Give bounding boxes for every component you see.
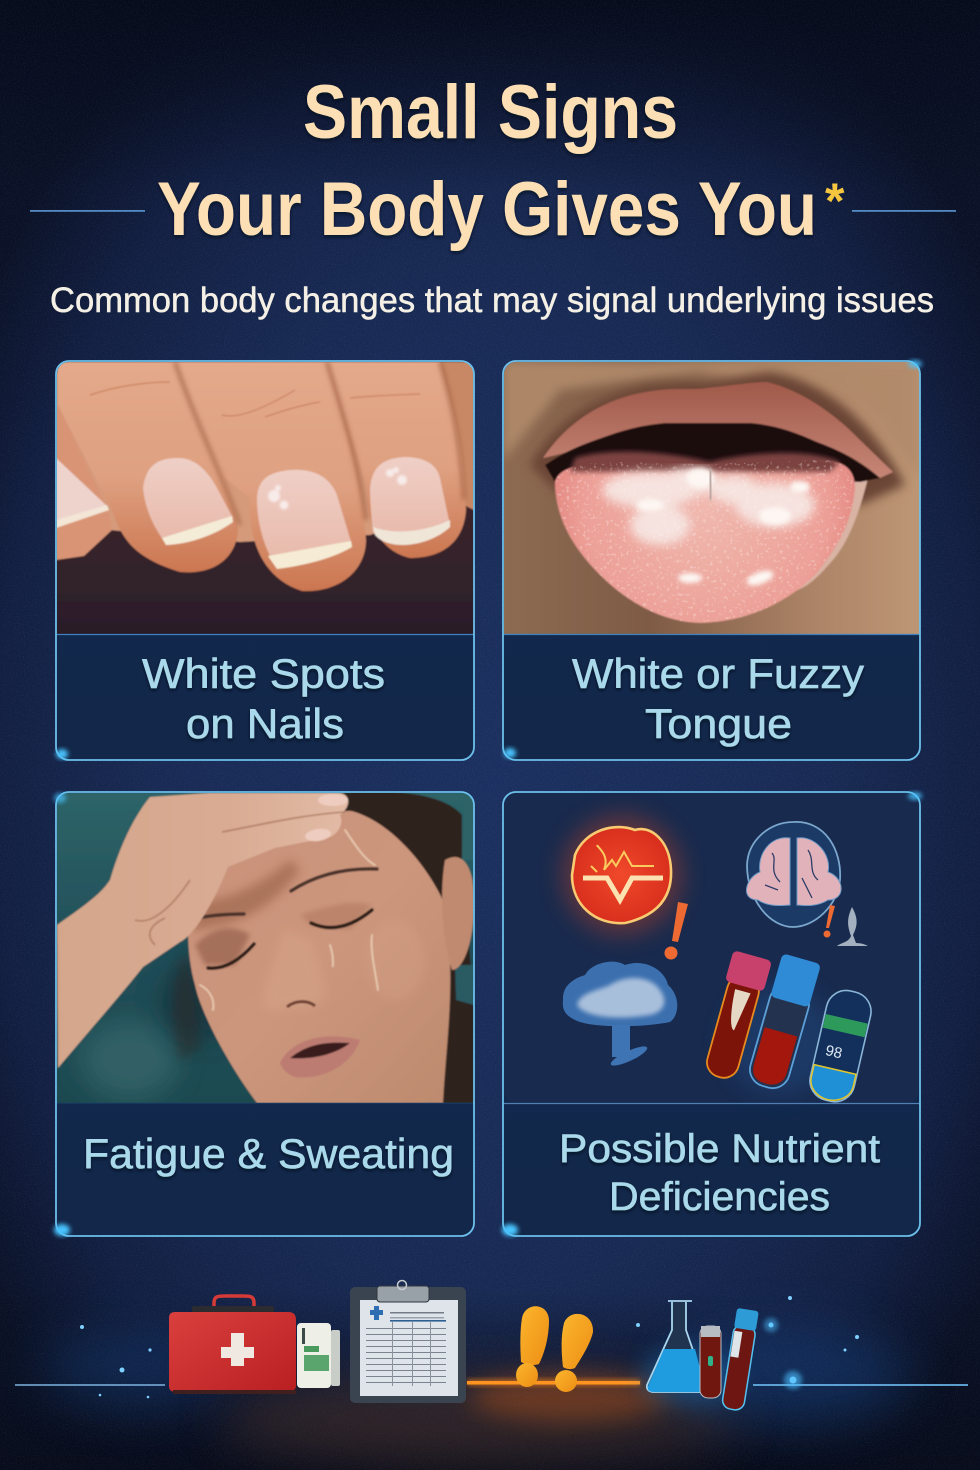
panel: white spots on nails [56, 361, 474, 760]
icon: clipboard [350, 1280, 466, 1403]
label: possible nutrient deficiencies [559, 1127, 880, 1219]
title: Small Signs [303, 70, 678, 155]
nose [264, 930, 326, 1010]
subtitle: Common body changes that may signal underlying issues [50, 281, 934, 320]
mouth [280, 1036, 360, 1077]
asterisk: * [825, 173, 845, 229]
icon: heart monitor [562, 815, 682, 935]
eyebrows [194, 869, 377, 919]
hand [57, 793, 348, 1068]
icon: small exclamation mark [824, 905, 835, 938]
title: Your Body Gives You [157, 167, 817, 252]
tube: red cap [700, 950, 772, 1082]
label: fatigue and sweating: Fatigue & Sweating [83, 1130, 454, 1177]
tube: green band [806, 986, 875, 1106]
photo: fingernails [56, 361, 474, 635]
icon: two amber exclamation marks [516, 1306, 593, 1392]
label: white or fuzzy tongue: Tongue [645, 700, 792, 747]
icon: bandage roll [297, 1323, 340, 1388]
label: possible nutrient deficiencies: Deficiencies [609, 1175, 830, 1219]
icon: flask and test tubes [640, 1301, 759, 1411]
label: possible nutrient deficiencies: Possible Nutrient [559, 1127, 880, 1171]
photo: tongue [503, 361, 920, 635]
icon: water drop [837, 907, 868, 946]
icon: blood tubes [700, 950, 875, 1106]
title side rule: right [852, 210, 956, 212]
title side rule: left [30, 210, 145, 212]
closed eyes [208, 910, 372, 968]
tube: green band: 98 [824, 1042, 844, 1062]
icon: brain in head [746, 822, 841, 927]
label: white spots on nails [142, 650, 385, 747]
bottom glow and horizon [15, 1296, 968, 1465]
label: white or fuzzy tongue [572, 650, 864, 747]
corner glows [54, 360, 922, 1236]
panel: possible nutrient deficiencies [503, 792, 920, 1236]
sweat [200, 830, 378, 1010]
icon: brain fog cloud [563, 962, 677, 1069]
panel: fatigue and sweating [56, 791, 474, 1236]
icon: first aid kit [169, 1296, 296, 1394]
panel: white or fuzzy tongue [503, 361, 920, 760]
photo: woman with hand on forehead [56, 791, 474, 1104]
tube: blue cap [746, 953, 821, 1092]
icon: exclamation mark [664, 902, 688, 960]
label: white spots on nails: on Nails [186, 700, 344, 747]
label: white or fuzzy tongue: White or Fuzzy [572, 650, 864, 697]
title [157, 70, 817, 252]
label: white spots on nails: White Spots [142, 650, 385, 697]
